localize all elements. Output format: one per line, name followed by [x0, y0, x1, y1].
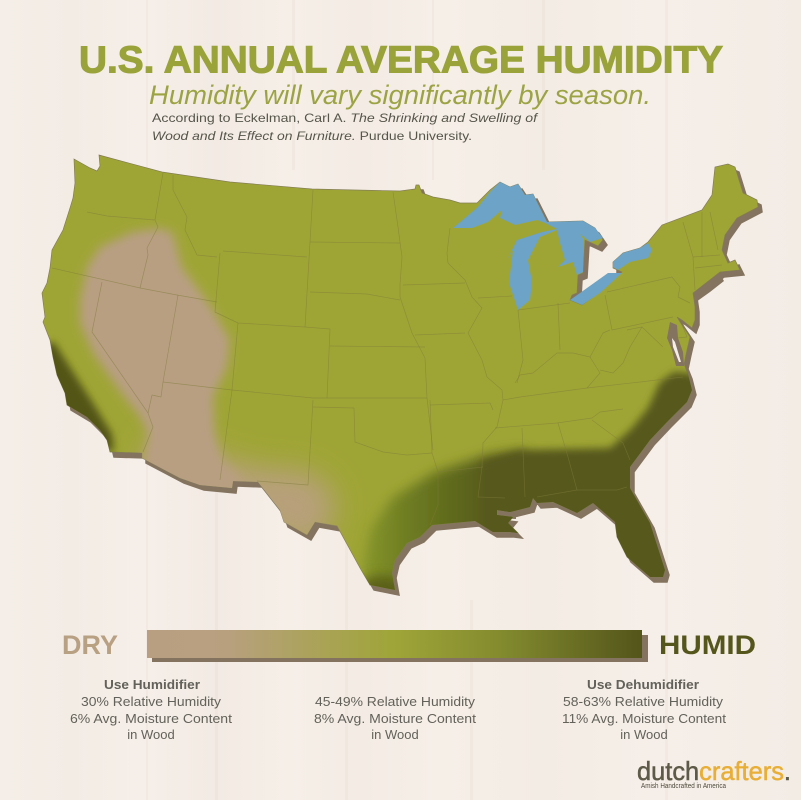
legend bar: [147, 630, 642, 658]
column: humid recommendation: 11% Avg. Moisture Content: [562, 711, 726, 726]
humid zone: south Texas tip: [364, 571, 395, 590]
column: humid recommendation: [562, 677, 726, 742]
humid zone: gulf band: [363, 450, 525, 605]
column: moderate conditions: 8% Avg. Moisture Content: [314, 711, 476, 726]
Chesapeake Bay water: [672, 338, 681, 362]
subtitle: Humidity will vary significantly by season.: [149, 80, 651, 110]
state borders: [52, 173, 722, 525]
column: humid recommendation: Use Dehumidifier: [587, 677, 699, 692]
citation: Wood and Its Effect on Furniture. Purdue University.: [152, 129, 472, 143]
map drop shadow: [46, 160, 762, 595]
legend: gradient scale: [62, 630, 756, 662]
column: dry recommendation: 6% Avg. Moisture Content: [70, 711, 232, 726]
column: moderate conditions: in Wood: [371, 727, 419, 742]
lake: Erie: [570, 273, 622, 305]
column: dry recommendation: [70, 677, 232, 742]
Louisiana bay shadow: [495, 508, 516, 519]
humid zone: southeast core: [484, 368, 692, 577]
climate shading clipped to land: [30, 228, 705, 608]
legend bar shadow: [152, 635, 648, 662]
title: U.S. ANNUAL AVERAGE HUMIDITY: [79, 40, 723, 82]
logo: dutchcrafters: Amish Handcrafted in America: [641, 783, 726, 790]
column: moderate conditions: 45-49% Relative Humidity: [315, 694, 476, 709]
lake: Superior, Michigan and Huron: [453, 182, 603, 310]
column: humid recommendation: in Wood: [620, 727, 668, 742]
citation: According to Eckelman, Carl A. The Shrinking and Swelling of: [152, 111, 539, 125]
humid zone: California coast: [50, 338, 118, 452]
column: dry recommendation: in Wood: [127, 727, 175, 742]
legend label: humid: HUMID: [659, 630, 756, 660]
column: humid recommendation: 58-63% Relative Humidity: [563, 694, 724, 709]
Long Island: [690, 276, 724, 302]
column: dry recommendation: 30% Relative Humidity: [81, 694, 222, 709]
citation: [152, 111, 539, 143]
column: dry recommendation: Use Humidifier: [104, 677, 200, 692]
dry zone: southwest fade: [140, 440, 335, 550]
legend label: dry: DRY: [62, 630, 118, 660]
lake: Ontario: [613, 243, 652, 270]
logo: dutchcrafters: dutchcrafters.: [637, 756, 791, 786]
column: moderate conditions: [314, 694, 476, 742]
dry zone: great basin: [80, 228, 250, 495]
land fill: [42, 155, 758, 590]
humidity map of the United States: [30, 155, 762, 608]
Chesapeake Bay shoreline: [667, 322, 684, 366]
